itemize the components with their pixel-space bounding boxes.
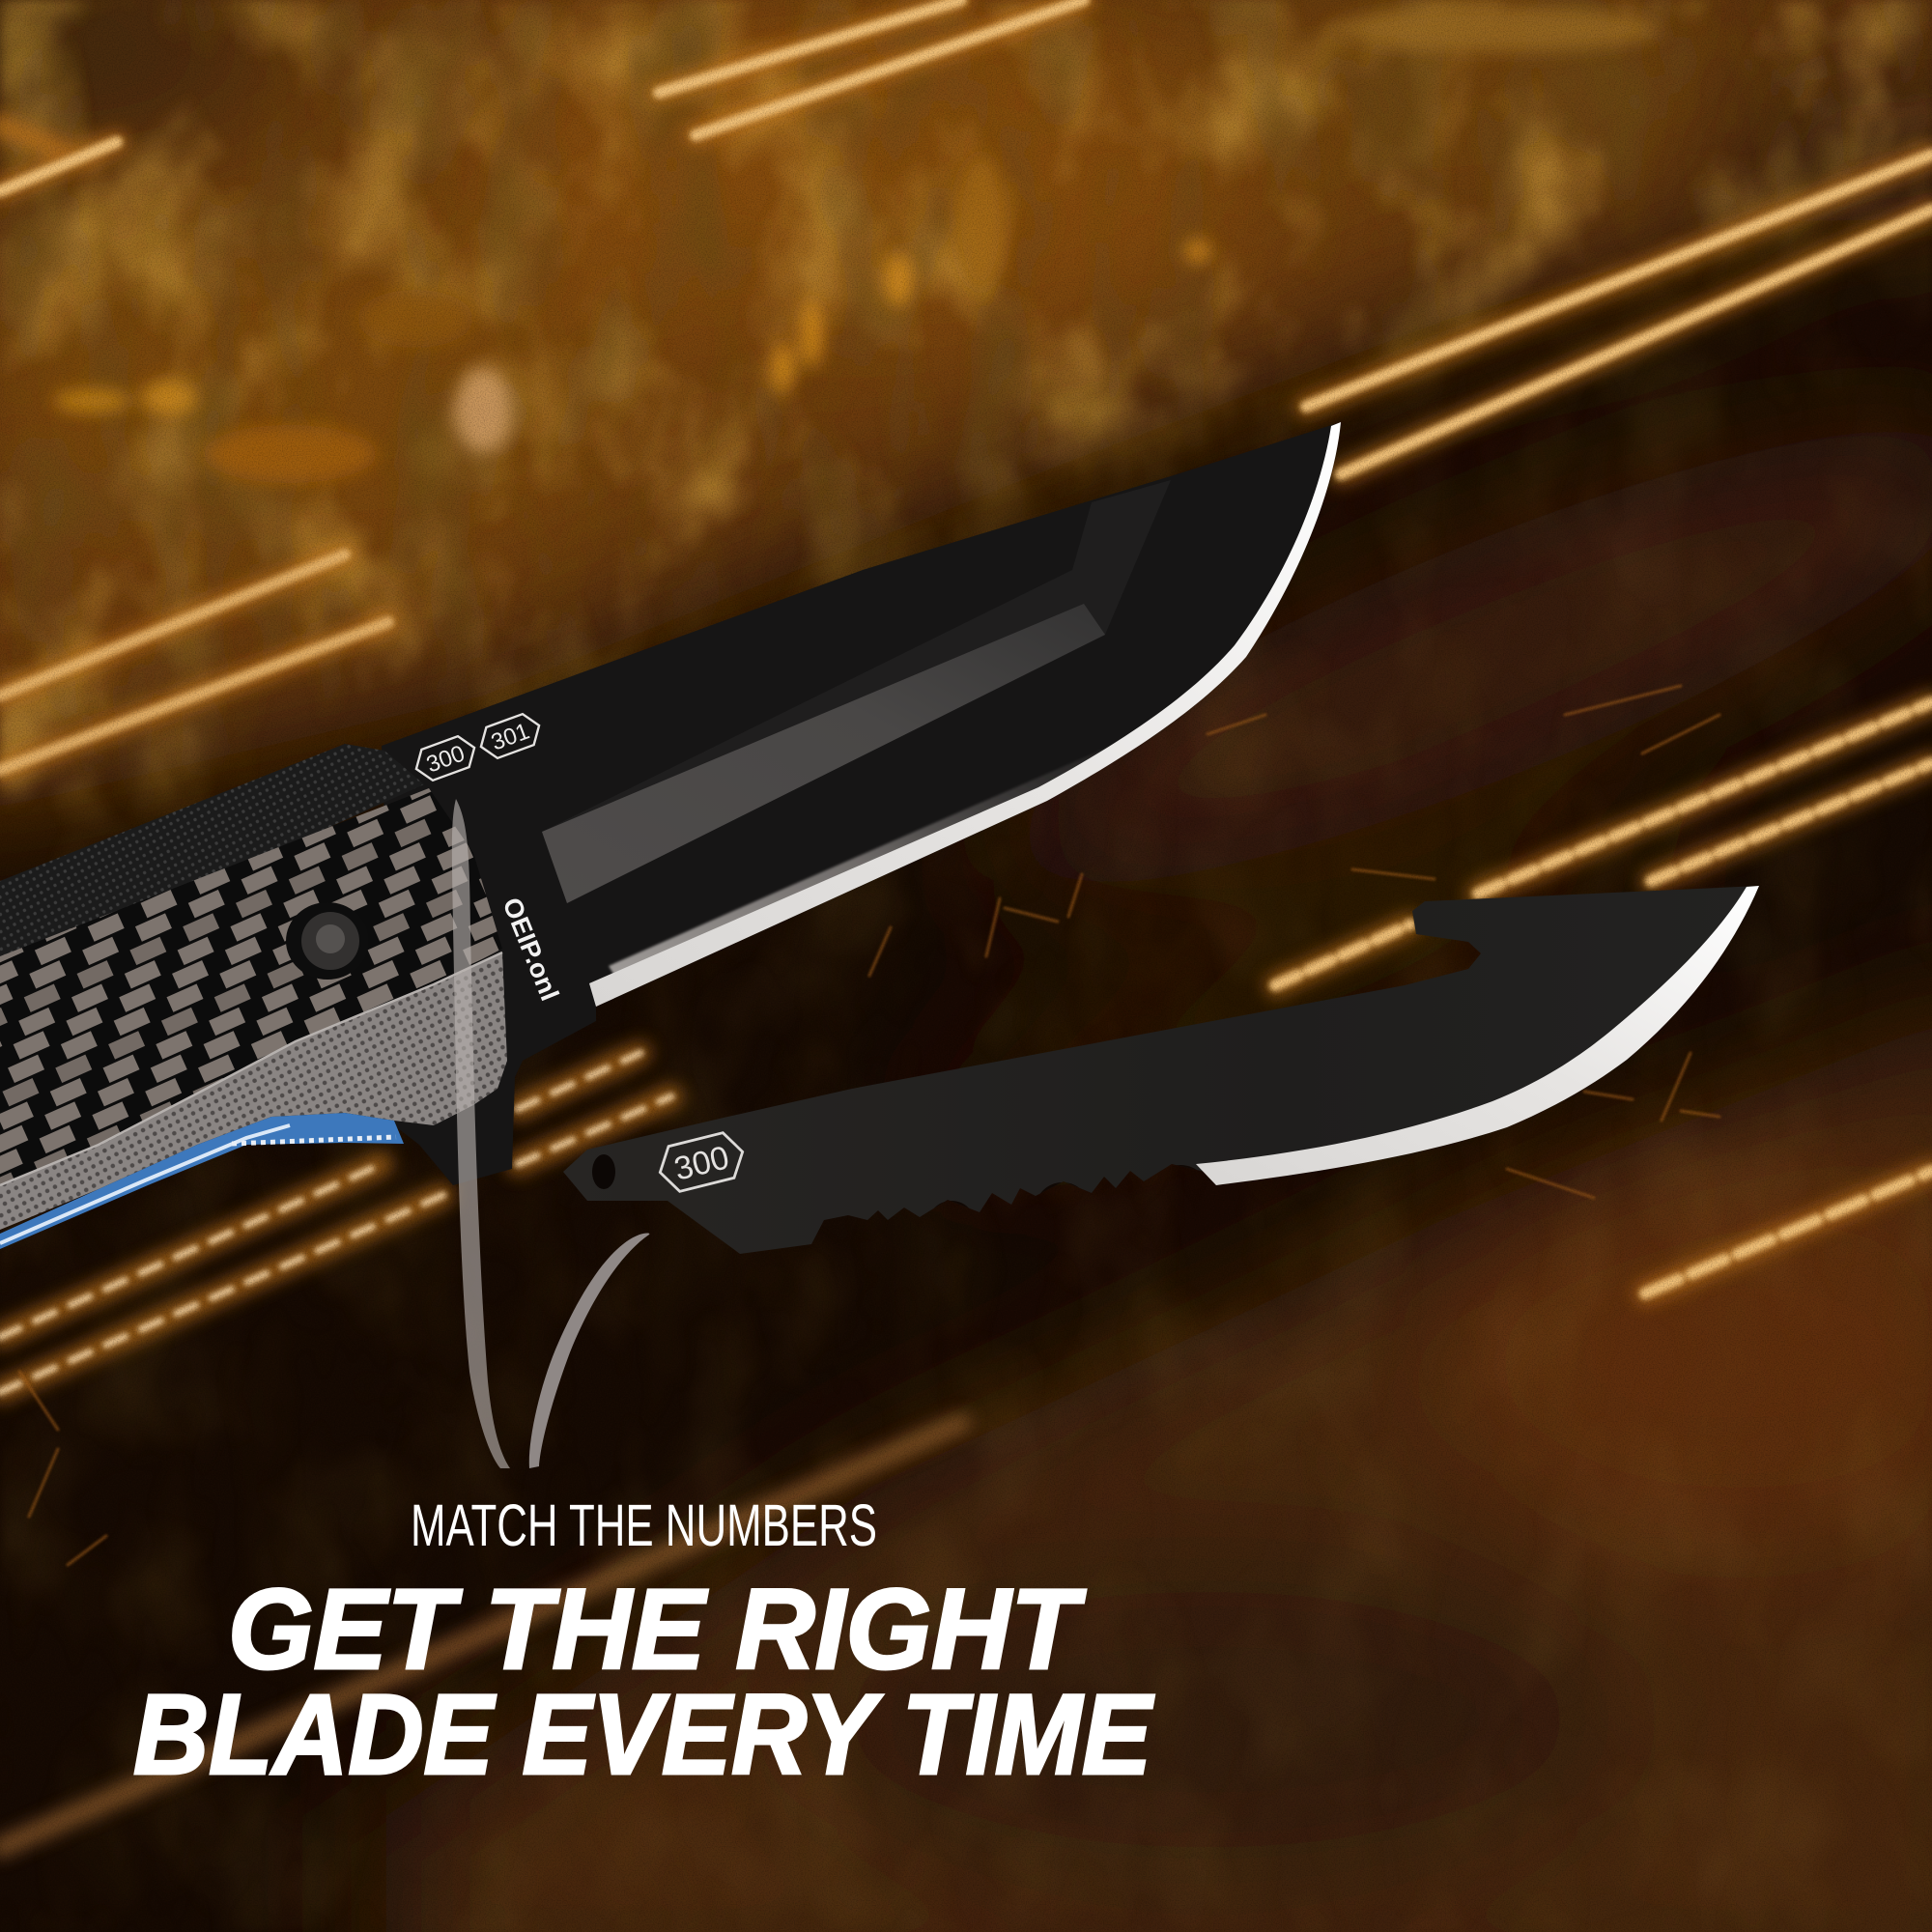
blue liner	[0, 1113, 404, 1249]
stroke to blade badge	[529, 1233, 649, 1468]
seam glow	[0, 0, 1932, 1392]
pivot screw	[286, 902, 369, 980]
stroke to handle badge	[452, 799, 510, 1468]
badge 300 on replacement blade: 300	[670, 1139, 732, 1188]
scratches on dark leather	[19, 686, 1719, 1565]
blade maker mark: OEIP.onl	[497, 894, 564, 1005]
gut-hook blade body	[563, 886, 1759, 1254]
handle	[0, 744, 507, 1249]
liner highlights	[0, 1125, 290, 1243]
replacement gut-hook blade	[563, 886, 1759, 1271]
blade body	[382, 422, 1341, 1185]
jimping	[232, 1137, 396, 1144]
handle lower micarta scale	[0, 952, 507, 1230]
edge haze	[609, 746, 1121, 981]
badge 300: 300	[423, 740, 469, 778]
blurred foreground seam	[0, 1423, 961, 1848]
badge 300 on replacement blade	[655, 1129, 748, 1195]
main blade	[382, 422, 1341, 1185]
blade bevel	[542, 480, 1171, 903]
handle carbon fibre panel	[0, 788, 502, 1185]
blade fuller	[542, 604, 1105, 903]
subheading: MATCH THE NUMBERS	[411, 1492, 877, 1558]
gut-hook sharpened edge	[1196, 886, 1759, 1185]
headline	[133, 1566, 1154, 1799]
handle wavy seam	[0, 952, 502, 1185]
badge 301: 301	[488, 718, 533, 755]
seam core	[0, 0, 1932, 1392]
bright patches on upper leather	[53, 6, 1662, 483]
handle top micarta scale	[0, 744, 424, 976]
gut-hook serration bites	[935, 1165, 1196, 1208]
lanyard hole	[592, 1154, 615, 1189]
blade sharpened edge	[589, 422, 1341, 1007]
knife: folding knife with carbon handle	[0, 422, 1341, 1249]
headline line 1: GET THE RIGHT	[228, 1566, 1087, 1693]
headline line 2: BLADE EVERY TIME	[133, 1671, 1154, 1799]
callout: brush strokes pointing to numbers	[452, 799, 649, 1468]
blade number badges	[411, 710, 545, 784]
